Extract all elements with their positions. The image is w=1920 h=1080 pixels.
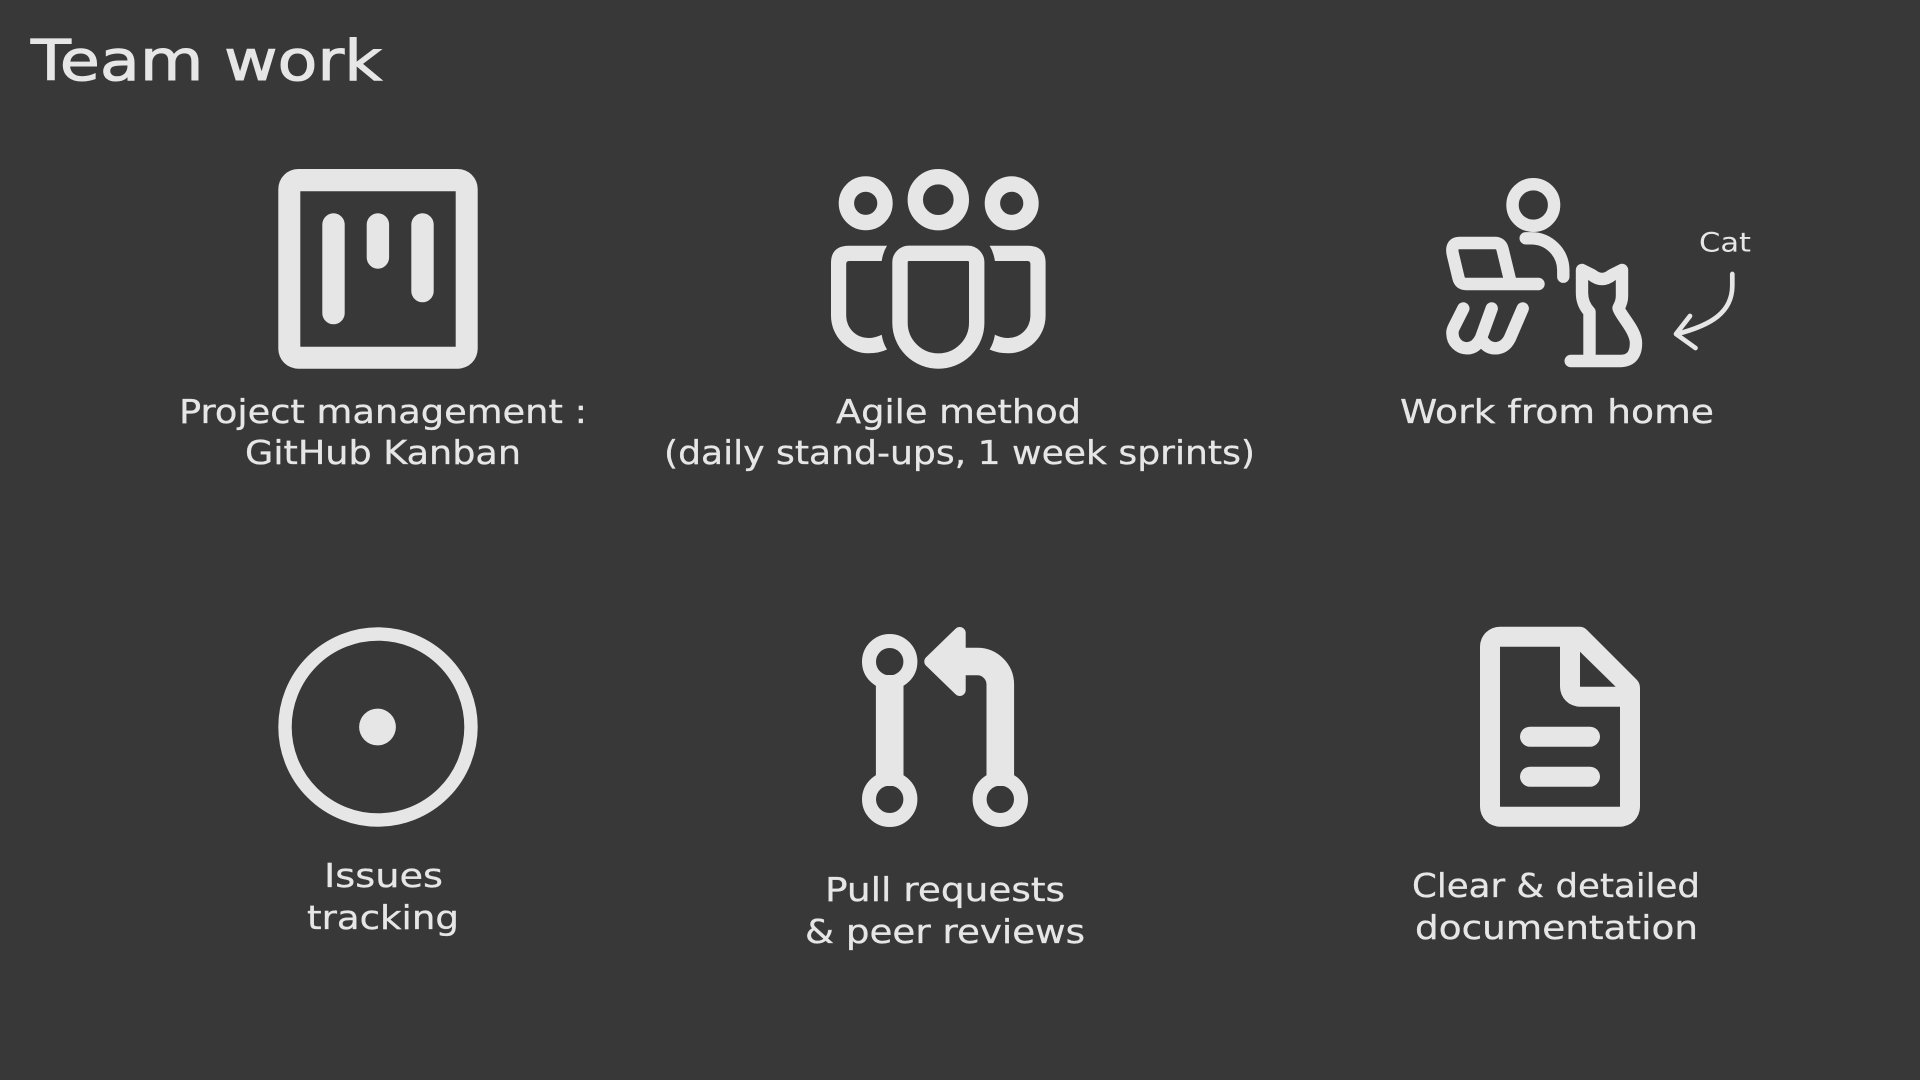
panel: pull requests xyxy=(805,633,1085,951)
label: pull requests: & peer reviews xyxy=(805,912,1085,951)
label: issues tracking: tracking xyxy=(307,898,459,937)
label: agile method xyxy=(664,392,1255,472)
panel: project management xyxy=(179,169,587,472)
icon: document xyxy=(1480,627,1640,827)
panel: issues tracking xyxy=(285,634,471,937)
label: agile method: (daily stand-ups, 1 week sprints) xyxy=(664,433,1255,472)
title: Team work xyxy=(30,29,383,94)
panel: work from home xyxy=(1400,184,1751,431)
label: project management xyxy=(179,392,587,472)
icon: pull request xyxy=(869,633,1021,820)
label: pull requests xyxy=(805,870,1085,951)
label: project management: Project management : xyxy=(179,392,587,431)
label: pull requests: Pull requests xyxy=(825,870,1065,909)
label: issues tracking: Issues xyxy=(324,856,443,895)
label: work from home: Work from home xyxy=(1400,392,1714,431)
icon: person at laptop with cat xyxy=(1452,184,1636,361)
label: project management: GitHub Kanban xyxy=(245,433,521,472)
label: documentation xyxy=(1412,866,1700,947)
panel: documentation xyxy=(1412,627,1700,947)
label: documentation: documentation xyxy=(1415,908,1698,947)
arrow: pointing at cat xyxy=(1676,274,1732,348)
icon: team of three people xyxy=(831,177,1046,361)
icon: open issue circle xyxy=(285,634,471,820)
label: issues tracking xyxy=(307,856,459,937)
label: agile method: Agile method xyxy=(836,392,1081,431)
icon: kanban board xyxy=(278,169,478,369)
annotation: cat label: Cat xyxy=(1699,228,1751,258)
label: documentation: Clear & detailed xyxy=(1412,866,1700,905)
panel: agile method xyxy=(664,177,1255,472)
